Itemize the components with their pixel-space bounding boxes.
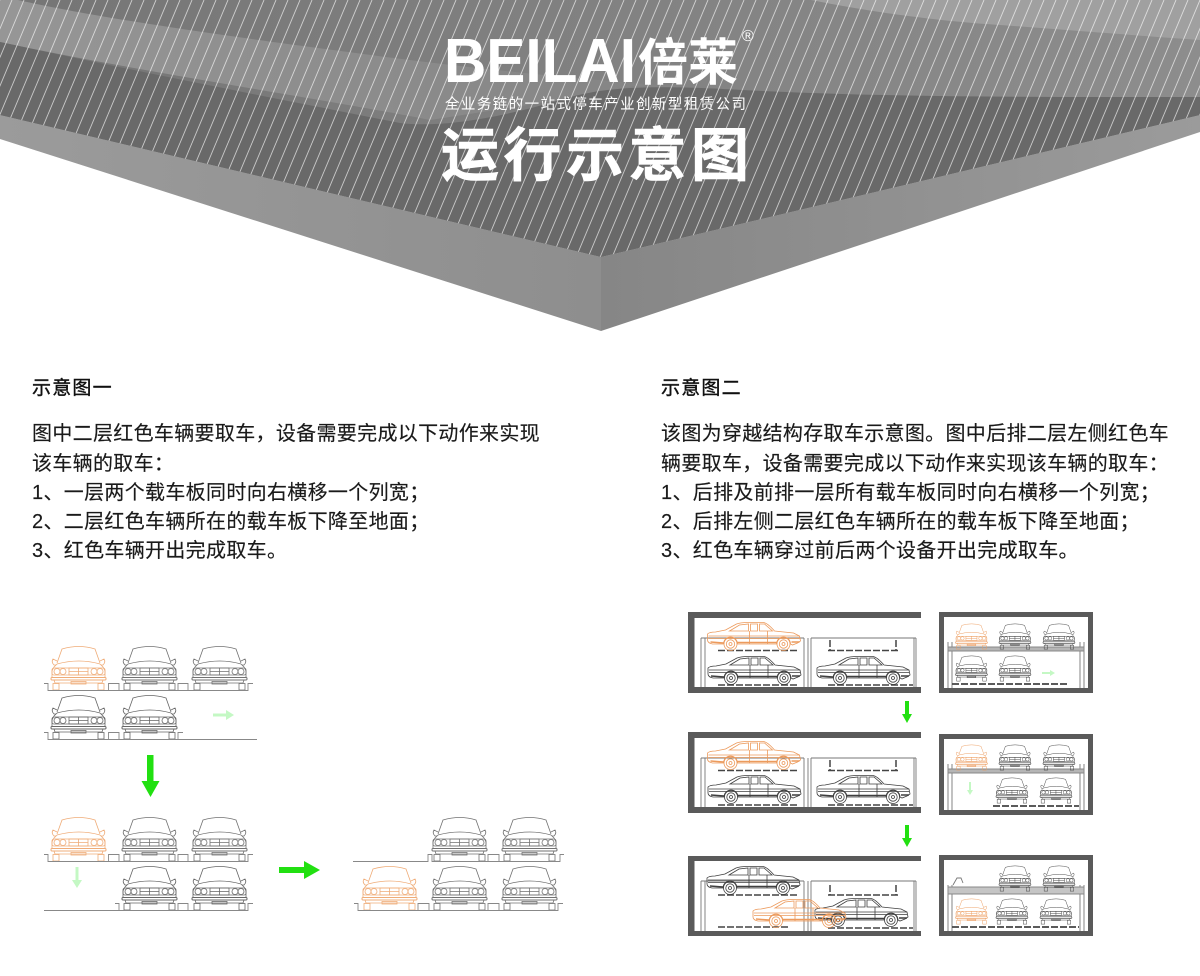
black car lower right: [817, 656, 910, 684]
banner left side face: [0, 115, 601, 331]
diagram two, side frame 2: [688, 732, 921, 813]
result top row cars: [432, 818, 557, 861]
result top row platforms: [353, 854, 564, 862]
black car lower left: [708, 656, 801, 684]
main title: 运行示意图: [441, 108, 749, 192]
lift structure: [701, 881, 916, 931]
registered mark: ®: [742, 28, 754, 45]
row 1 platforms: [44, 684, 253, 690]
frame box: [942, 614, 1090, 690]
diagram two, front frame 3: [942, 858, 1090, 934]
diagram two, side frame 1: [688, 612, 921, 693]
big arrow: down to next step: [142, 755, 160, 797]
text: diagram two description: 该图为穿越结构存取车示意图。图中后排二层左侧红色车: [661, 423, 1169, 445]
black car lower right: [817, 776, 910, 804]
pit wall: [688, 612, 921, 693]
row 3 platforms: [44, 854, 253, 862]
small arrow down 2: [902, 825, 912, 847]
small cars: [956, 624, 1075, 681]
text: diagram two description: 2、后排左侧二层红色车辆所在的载车板下降至地面；: [661, 511, 1140, 533]
frame box: [942, 858, 1090, 934]
row 2 cars: [51, 696, 177, 739]
row 4 cars: [122, 866, 247, 910]
black car lower left: [708, 776, 801, 804]
row 3 cars: [51, 818, 247, 861]
diagram two, side frame 3: [688, 856, 921, 936]
light arrow: down: [967, 782, 973, 795]
black car raised: [707, 866, 800, 894]
text: diagram two description: [661, 422, 1169, 562]
text: diagram one description: 1、一层两个载车板同时向右横移一个列宽；: [32, 482, 430, 504]
result bottom row platforms: [354, 904, 563, 910]
diagram two, front frame 1: [942, 614, 1090, 690]
orange car upper: [708, 622, 800, 650]
brand logo: [444, 23, 754, 96]
small cars: [956, 745, 1075, 803]
lift structure: [701, 638, 916, 687]
logo latin wordmark: BEILAI: [444, 27, 636, 96]
black car lower right: [815, 898, 908, 926]
row 2 platforms: [44, 732, 257, 740]
result bottom row cars: [362, 866, 557, 910]
text: diagram one description: 2、二层红色车辆所在的载车板下降至地面；: [32, 511, 430, 533]
frame box: [942, 736, 1090, 812]
text: diagram one description: [32, 422, 540, 562]
heading: diagram two: 示意图二: [661, 378, 742, 398]
text: diagram two description: 3、红色车辆穿过前后两个设备开出完成取车。: [661, 540, 1079, 562]
diagram two, front frame 2: [942, 736, 1090, 812]
structure: [948, 878, 1084, 931]
pit wall: [688, 856, 921, 936]
small cars: [956, 866, 1075, 924]
text: diagram one description: 该车辆的取车：: [32, 453, 174, 475]
diagram one: front views: [44, 646, 564, 910]
banner top face with wave bands: [0, 0, 1200, 260]
small arrow down 1: [902, 701, 912, 723]
lift structure: [701, 758, 916, 807]
heading: diagram one: 示意图一: [32, 378, 113, 398]
orange car upper: [708, 742, 800, 770]
structure: [948, 642, 1084, 688]
text: diagram two description: 1、后排及前排一层所有载车板同时向右横移一个列宽；: [661, 482, 1160, 504]
structure: [948, 764, 1084, 810]
text: diagram one description: 3、红色车辆开出完成取车。: [32, 540, 287, 562]
tagline: 全业务链的一站式停车产业创新型租赁公司: [445, 93, 746, 114]
row 1 cars: [51, 646, 247, 690]
text: diagram two description: 辆要取车，设备需要完成以下动作来实现该车辆的取车：: [661, 453, 1169, 475]
big arrow: right to result: [279, 861, 320, 879]
orange car leaving: [753, 900, 846, 928]
header banner: [0, 0, 1200, 331]
row 4 platforms: [44, 904, 253, 910]
banner right side face: [601, 115, 1200, 331]
light arrow: lateral shift right: [213, 710, 234, 720]
pit wall: [688, 732, 921, 813]
light arrow: pallet lowers: [72, 867, 82, 888]
text: diagram one description: 图中二层红色车辆要取车，设备需要完成以下动作来实现: [32, 423, 540, 445]
light arrow: right: [1042, 670, 1055, 676]
logo chinese wordmark: 倍莱: [638, 23, 738, 95]
